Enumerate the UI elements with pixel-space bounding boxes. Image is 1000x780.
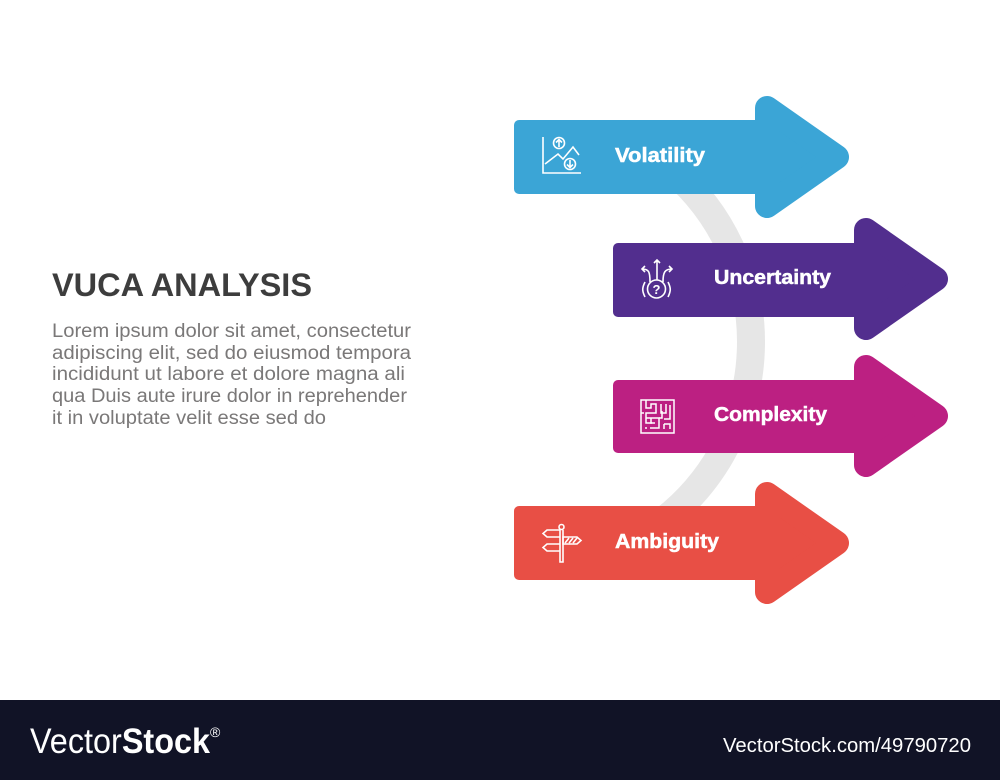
curved connector arc	[658, 170, 751, 525]
arrow head	[866, 230, 936, 328]
arrow: Uncertainty	[613, 230, 936, 328]
arrow: Ambiguity	[514, 494, 837, 592]
text block: description: it in voluptate velit esse sed do	[52, 408, 326, 429]
text block: description: qua Duis aute irure dolor in reprehender	[52, 386, 408, 407]
icon: question mark with diverging arrows	[642, 260, 672, 298]
registered mark: ®	[210, 724, 221, 740]
image id: VectorStock.com/49790720	[723, 735, 971, 757]
text block: description	[52, 321, 412, 429]
arrow body	[514, 120, 764, 194]
text block: description: adipiscing elit, sed do eiusmod tempora	[52, 343, 411, 364]
icon: maze	[641, 400, 674, 433]
icon: signpost	[543, 524, 581, 562]
icon: chart with up and down arrows	[543, 137, 581, 173]
text block: description: incididunt ut labore et dolore magna ali	[52, 364, 405, 385]
label: Volatility	[615, 145, 706, 167]
label: Complexity	[714, 404, 828, 426]
title: VUCA ANALYSIS	[52, 267, 312, 303]
arrow: Volatility	[514, 108, 837, 206]
arrow body	[613, 243, 863, 317]
arrow body	[514, 506, 764, 580]
label: Uncertainty	[714, 267, 832, 289]
arrow head	[866, 367, 936, 465]
arrow body	[613, 380, 863, 453]
footer band	[0, 700, 1000, 780]
icon: question mark with diverging arrows: ?	[653, 282, 661, 297]
text block: description: Lorem ipsum dolor sit amet, consectetur	[52, 321, 412, 342]
arrow head	[767, 494, 837, 592]
arrow head	[767, 108, 837, 206]
logo: VectorStock: VectorStock	[30, 722, 210, 761]
arrow: Complexity	[613, 367, 936, 465]
label: Ambiguity	[615, 531, 720, 553]
